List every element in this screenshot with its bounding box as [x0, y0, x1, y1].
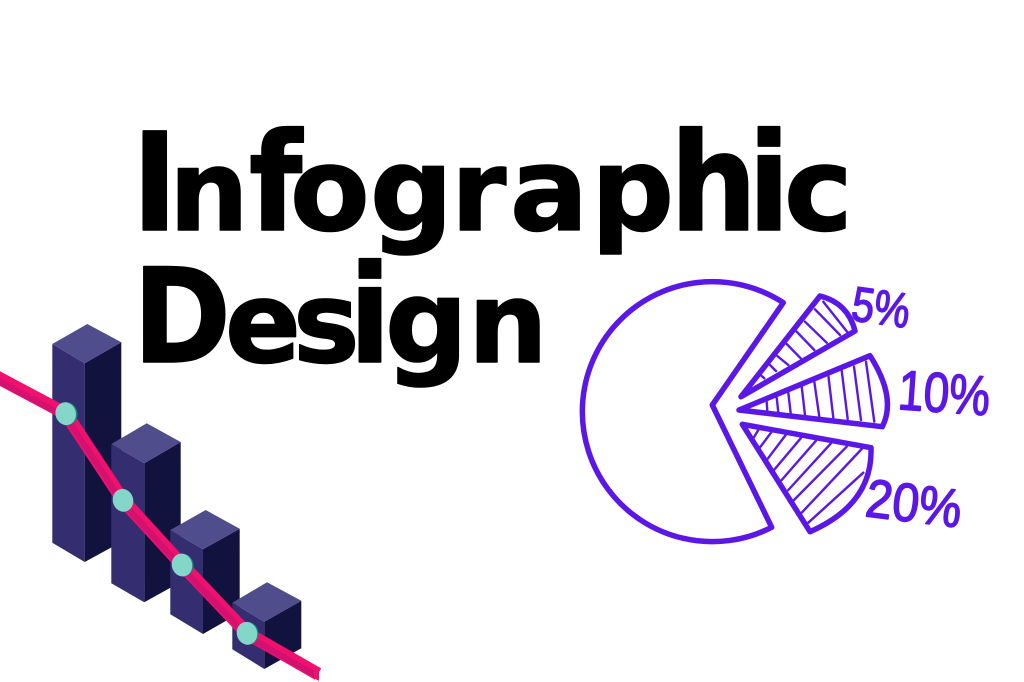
title line 1: p: [591, 123, 674, 258]
title line 2: i: [349, 237, 391, 395]
bar 3: [170, 510, 240, 634]
bar 4: [232, 582, 301, 669]
main pie slice: [582, 282, 783, 542]
title line 1: a: [510, 123, 588, 258]
title: [132, 105, 853, 395]
label 10%: 10%: [896, 358, 992, 427]
10% slice: [739, 356, 887, 427]
title line 1: g: [370, 123, 453, 258]
isometric bar chart with trend line: [0, 324, 319, 681]
20% slice: [742, 424, 871, 532]
title line 2: D: [133, 240, 231, 393]
title line 2: s: [293, 259, 360, 389]
title line 1: c: [784, 123, 853, 258]
bar 2: [111, 423, 181, 602]
trend line: [0, 376, 319, 681]
label 5%: 5%: [848, 277, 913, 339]
title line 1: h: [670, 105, 757, 263]
label 20%: 20%: [863, 468, 965, 540]
title line 1: r: [451, 127, 506, 257]
title line 2: g: [385, 255, 468, 390]
title line 1: I: [132, 105, 178, 263]
bar 1: [52, 324, 121, 562]
title line 1: i: [748, 105, 790, 263]
title line 1: o: [290, 123, 370, 258]
title line 2: e: [225, 259, 301, 389]
title line 1: n: [169, 127, 249, 257]
title line 2: n: [468, 259, 548, 389]
hand-drawn pie chart: [582, 277, 992, 542]
title line 1: f: [249, 105, 304, 263]
5% slice: [741, 296, 855, 397]
trend line markers: [53, 400, 261, 647]
